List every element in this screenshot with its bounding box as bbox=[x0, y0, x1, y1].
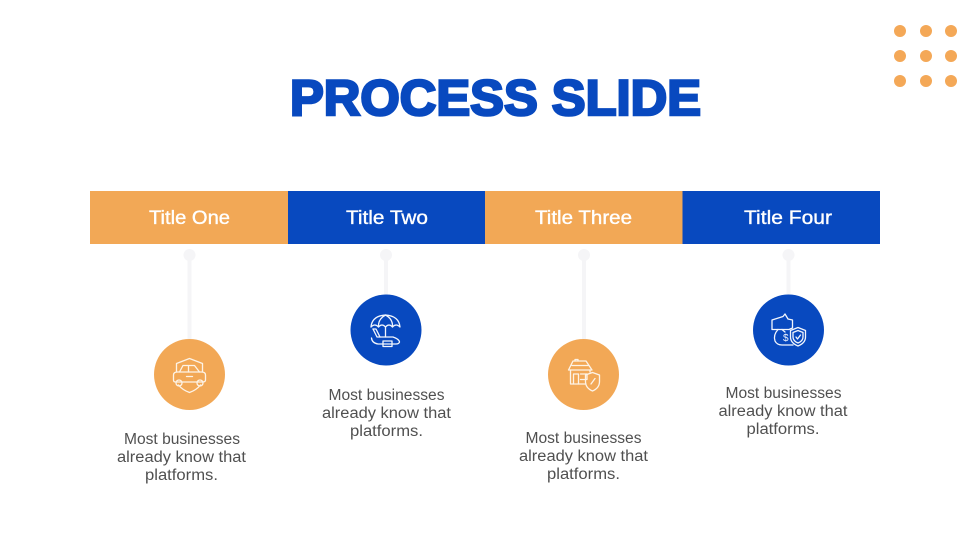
text two: already know that bbox=[322, 405, 452, 422]
text one: Most businesses bbox=[124, 431, 240, 448]
text three bbox=[519, 430, 649, 483]
header: title one bbox=[90, 191, 288, 244]
header: title one: Title One bbox=[149, 208, 230, 229]
text one bbox=[117, 431, 247, 484]
header: title two: Title Two bbox=[346, 208, 428, 229]
text two bbox=[322, 387, 452, 440]
text three: already know that bbox=[519, 448, 649, 465]
badge three bbox=[548, 339, 619, 410]
icon: money bag and shield bbox=[772, 314, 806, 346]
icon: umbrella and plane bbox=[371, 315, 400, 346]
text four: already know that bbox=[718, 403, 848, 420]
step four bbox=[718, 249, 848, 438]
header: title four bbox=[682, 191, 880, 244]
badge four bbox=[753, 294, 824, 366]
header bar bbox=[90, 191, 880, 244]
step two bbox=[322, 249, 452, 440]
connector one bbox=[184, 249, 196, 341]
text one: already know that bbox=[117, 449, 247, 466]
text two: Most businesses bbox=[328, 387, 445, 404]
connector two bbox=[380, 249, 392, 297]
icon: car with shield bbox=[174, 358, 206, 392]
icon: money bag and shield: $ bbox=[783, 333, 789, 344]
text four bbox=[718, 385, 848, 438]
connector four bbox=[782, 249, 794, 297]
text one: platforms. bbox=[145, 467, 218, 484]
text three: platforms. bbox=[547, 466, 620, 483]
step three bbox=[519, 249, 649, 483]
text four: platforms. bbox=[746, 421, 820, 438]
badge two bbox=[350, 294, 422, 366]
header: title two bbox=[288, 191, 485, 244]
text two: platforms. bbox=[350, 423, 423, 440]
title: PROCESS SLIDE bbox=[290, 69, 701, 126]
header: title three: Title Three bbox=[535, 208, 632, 229]
decorative dot grid bbox=[894, 25, 957, 87]
header: title four: Title Four bbox=[744, 208, 833, 229]
connector three bbox=[578, 249, 590, 341]
text four: Most businesses bbox=[726, 385, 842, 402]
step one bbox=[117, 249, 247, 484]
header: title three bbox=[485, 191, 682, 244]
text three: Most businesses bbox=[526, 430, 642, 447]
icon: house with shield bbox=[568, 360, 600, 391]
badge one bbox=[154, 339, 225, 410]
